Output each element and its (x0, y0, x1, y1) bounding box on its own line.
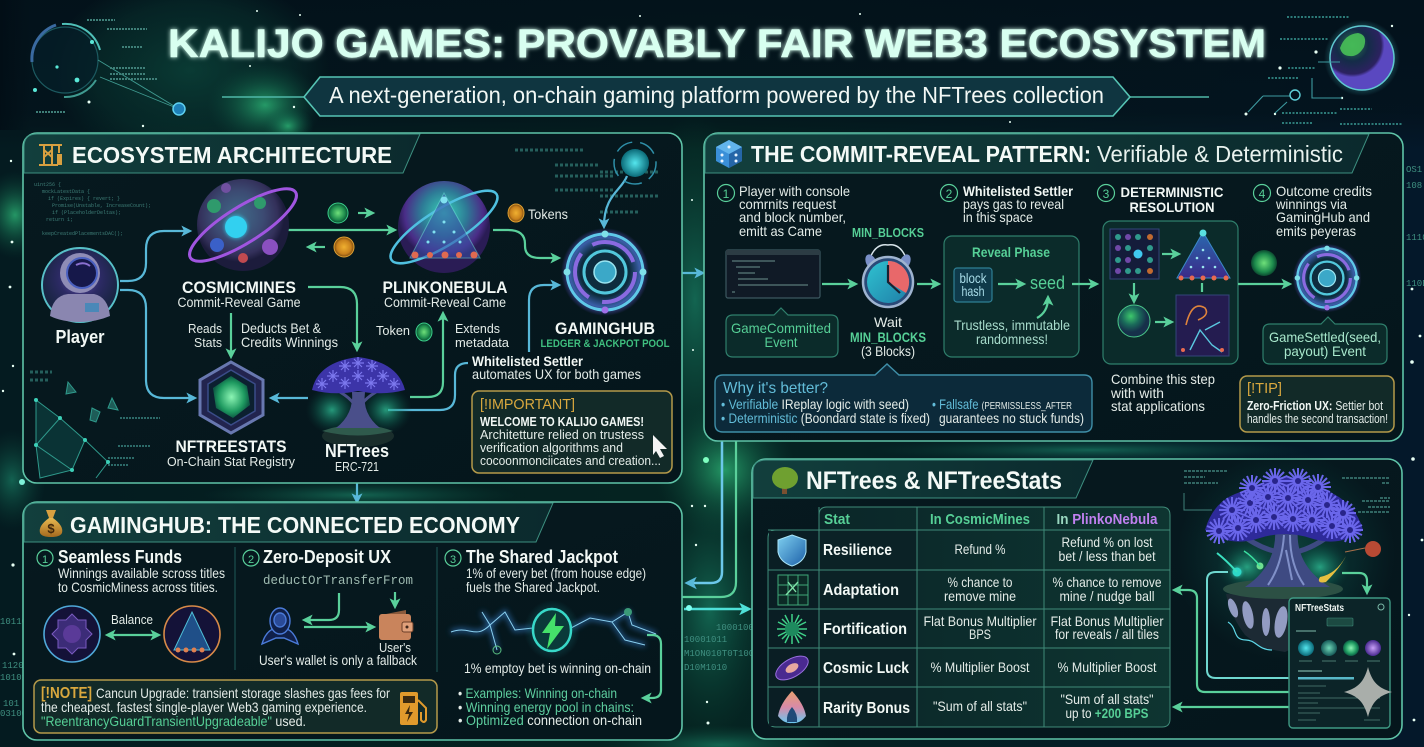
connector arrows between panels (357, 273, 748, 611)
callout: why it's better: • Verifiable IReplay logic with seed) (721, 396, 909, 412)
background: 101 (3, 699, 19, 709)
step 2: in this space (963, 209, 1033, 225)
label: nftreestats (167, 437, 295, 469)
heading: commit-reveal (705, 134, 1369, 173)
heading: ecosystem architecture: ECOSYSTEM ARCHITECTURE (72, 142, 392, 168)
row: cosmic luck: % Multiplier Boost (1058, 659, 1157, 675)
step 1: comrnits request (739, 196, 836, 212)
label: cosmicmines: COSMICMINES (182, 278, 296, 297)
callout: note: "ReentrancyGuardTransientUpgradeable" used. (41, 713, 306, 729)
row: fortification: BPS (969, 626, 991, 642)
label: plinkonebula: Commit-Reveal Came (384, 294, 506, 310)
icon: medal plinko (164, 606, 220, 662)
row: rarity bonus (778, 691, 1154, 723)
row: cosmic luck (772, 651, 1157, 685)
icon: clock (863, 245, 913, 307)
label: cosmicmines: Commit-Reveal Game (178, 294, 301, 310)
illustration: big tree (1175, 450, 1395, 660)
section 3: shared jackpot: fuels the Shared Jackpot. (466, 579, 600, 595)
section 2: zero-deposit: 2 (248, 554, 254, 566)
row: rarity bonus: up to +200 BPS (1066, 705, 1148, 721)
row: resilience: Refund % (954, 541, 1006, 557)
icon: coin orange (334, 237, 354, 257)
step 4: Outcome credits (1276, 183, 1372, 199)
label: extends metadata (455, 321, 510, 350)
event: gamesettled: payout) Event (1284, 343, 1366, 359)
note: combine: Combine this step (1111, 371, 1215, 387)
section 3: shared jackpot: 1% emptoy bet is winning on-chain (464, 660, 651, 676)
label: deducts bet: Credits Winnings (241, 334, 338, 350)
heading: nftrees (753, 460, 1093, 498)
icon: plinko triangle (1177, 230, 1230, 280)
step 4: winnings via (1275, 196, 1347, 212)
icon: console (726, 250, 820, 298)
step 2: 2 (946, 187, 953, 201)
block hash: hash (962, 283, 984, 299)
label: token: Token (376, 323, 410, 338)
label: deducts bet (241, 320, 338, 350)
event: gamecommitted: GameCommitted (731, 320, 831, 336)
decoration: code snippet: uint256 { (34, 182, 61, 188)
callout: note (34, 680, 437, 733)
icon: path map (1176, 295, 1229, 356)
step 1 (718, 183, 850, 239)
decoration: planet top right (1248, 17, 1402, 124)
background: D10M1010 (684, 663, 727, 673)
section 3: shared jackpot: The Shared Jackpot (466, 547, 618, 567)
title: KALIJO GAMES: PROVABLY FAIR WEB3 ECOSYSTEM (168, 22, 1266, 66)
section 1: seamless funds: Balance (111, 612, 153, 627)
decoration: code snippet: return 1; (46, 217, 73, 223)
section 1: seamless funds (37, 547, 225, 662)
icon: astronaut outline (262, 608, 298, 644)
label: nftrees (325, 441, 389, 474)
row: fortification (777, 613, 1164, 644)
row: resilience: Resilience (823, 542, 892, 559)
arrows: tree to table (1175, 572, 1367, 707)
icon: mines grid (1110, 229, 1159, 279)
label: plinkonebula (382, 278, 508, 310)
icon: player astronaut (42, 248, 118, 322)
section 1: seamless funds: to CosmicMiness across tities. (58, 579, 218, 595)
label: whitelisted settler: automates UX for both games (472, 366, 641, 382)
label: reads stats (188, 321, 222, 350)
icon: money bag: $ (47, 521, 55, 536)
icon: wallet (379, 610, 413, 640)
row: adaptation: % chance to remove (1052, 574, 1162, 590)
label: cosmicmines (178, 278, 301, 310)
row: fortification: Fortification (823, 621, 907, 638)
table header: Stat (824, 511, 850, 528)
section 3: shared jackpot (445, 547, 661, 728)
background: 03100 (0, 709, 27, 719)
step 4 (1254, 183, 1372, 239)
section 3: shared jackpot: • Optimized connection on-chain (458, 712, 642, 728)
heading: commit-reveal: THE COMMIT-REVEAL PATTERN: (751, 141, 1091, 167)
decoration: code snippet (34, 182, 151, 237)
callout: why it's better: • Fallsafe (PERMISSLESS_AFTER (932, 396, 1072, 412)
label: whitelisted settler: Whitelisted Settler (472, 353, 583, 369)
section 1: seamless funds: Winnings available scross titles (58, 565, 225, 581)
subtitle banner (222, 77, 1209, 116)
section 1: seamless funds: 1 (42, 554, 48, 566)
event: gamecommitted: Event (764, 334, 798, 350)
label: min blocks: MIN_BLOCKS (852, 225, 924, 240)
icon: small orbiting globe (614, 142, 656, 184)
note: combine: with with (1110, 385, 1164, 401)
row: fortification: for reveals / all tiles (1055, 626, 1159, 642)
subtitle banner: A next-generation, on-chain gaming platform powered by the NFTrees collection (329, 82, 1104, 108)
section 3: shared jackpot: 1% of every bet (from house edge) (466, 565, 646, 581)
note: combine: stat applications (1111, 398, 1205, 414)
icon: coin (1251, 250, 1277, 276)
row: fortification: Flat Bonus Multiplier (1050, 613, 1164, 629)
decoration: code snippet: Promise(Unstable, IncreaseCount); (52, 203, 151, 209)
decoration: network mesh (34, 382, 160, 478)
callout: important: WELCOME TO KALIJO GAMES! (480, 414, 644, 429)
step 1: emitt as Came (739, 223, 822, 239)
section 3: shared jackpot: • Examples: Winning on-chain (458, 685, 617, 701)
heading: connected economy: GAMINGHUB: THE CONNECTED ECONOMY (70, 512, 520, 538)
arrow (822, 283, 855, 285)
label: nftrees: NFTrees (325, 441, 389, 461)
label: nftrees: ERC-721 (335, 459, 379, 474)
heading: nftrees: NFTrees & NFTreeStats (806, 467, 1062, 495)
row: rarity bonus: "Sum of all stats" (1060, 691, 1154, 707)
background: 10110 (0, 617, 27, 627)
tree roots and island (1223, 579, 1343, 652)
section 1: seamless funds: Seamless Funds (58, 547, 182, 567)
decoration: code snippet: keepCreatedPlacementsDAC(); (42, 231, 123, 237)
arrow (917, 283, 938, 285)
step 1: and block number, (739, 209, 846, 225)
label: nftreestats: On-Chain Stat Registry (167, 454, 295, 469)
step 1: Player with console (739, 183, 850, 199)
panel: commit-reveal pattern (704, 133, 1403, 441)
callout: why it's better: guarantees no stuck funds) (939, 410, 1084, 426)
resolution box (1103, 221, 1238, 364)
label: nftreestats: NFTREESTATS (176, 437, 286, 456)
decoration: code snippet: mockLatestData { (42, 189, 90, 195)
background: 10101 (0, 673, 27, 683)
stats table (768, 507, 1170, 727)
callout: note: [!NOTE] (41, 685, 92, 702)
row: resilience (778, 534, 1156, 566)
icon: tree (772, 467, 798, 494)
label: tokens (508, 204, 568, 222)
panel: nftrees and nftreestats (752, 450, 1402, 739)
callout: why it's better (715, 364, 1092, 432)
arrows (120, 176, 627, 410)
row: adaptation: % chance to (948, 574, 1013, 590)
reveal phase box: seed (1030, 273, 1065, 293)
row: rarity bonus: Rarity Bonus (823, 700, 910, 717)
decoration: HUD circle top left (32, 20, 185, 115)
table header: In CosmicMines (930, 511, 1030, 528)
background: 108 (1406, 181, 1422, 191)
label: gaminghub: LEDGER & JACKPOT POOL (540, 338, 670, 350)
reveal phase box (944, 236, 1079, 357)
reveal phase box: Reveal Phase (972, 244, 1050, 260)
label: whitelisted settler (472, 353, 641, 382)
step 3: DETERMINISTIC (1120, 184, 1224, 200)
row: resilience: bet / less than bet (1058, 548, 1156, 564)
step 4: 4 (1259, 187, 1266, 201)
label: reads stats: Reads (188, 321, 222, 336)
step 2: Whitelisted Settler (963, 183, 1073, 199)
event: gamesettled (1263, 317, 1387, 364)
row: cosmic luck: Cosmic Luck (823, 660, 909, 677)
callout: important: verification algorithms and (480, 440, 623, 455)
callout: important (472, 391, 672, 473)
row: rarity bonus: "Sum of all stats" (933, 698, 1027, 714)
step 2: pays gas to reveal (963, 196, 1064, 212)
row: adaptation (778, 574, 1162, 605)
event: gamesettled: GameSettled(seed, (1269, 329, 1381, 345)
step 4: GamingHub and (1276, 209, 1370, 225)
callout: important: cocoonmonciicates and creation... (480, 453, 661, 468)
label: extends metadata: Extends (455, 321, 500, 336)
label: reads stats: Stats (194, 335, 222, 350)
decoration: code snippet: if (Expires) { revert; } (48, 196, 120, 202)
icon: cursor (653, 435, 667, 458)
tree canopy (1205, 468, 1363, 544)
block hash (954, 268, 992, 302)
callout: important: [!IMPORTANT] (480, 396, 575, 413)
label: deducts bet: Deducts Bet & (241, 320, 322, 336)
label: plinkonebula: PLINKONEBULA (382, 278, 508, 297)
callout: note: the cheapest. fastest single-player Web3 gaming experience. (41, 699, 367, 715)
background: M1ON010T0T1001 (684, 649, 760, 659)
callout: why it's better: • Deterministic (Boondard state is fixed) (721, 410, 930, 426)
row: cosmic luck: % Multiplier Boost (930, 659, 1030, 675)
section 2: zero-deposit: deductOrTransferFrom (263, 573, 413, 588)
reveal phase box: Trustless, immutable (954, 317, 1070, 333)
callout: note: Cancun Upgrade: transient storage slashes gas fees for (96, 685, 390, 701)
table header (824, 511, 1158, 528)
step 4: emits peyeras (1276, 223, 1356, 239)
decoration: code snippet: if (PlaceholderDeltas); (52, 210, 121, 216)
decoration: data labels (1184, 471, 1390, 512)
panel: gaminghub connected economy (23, 502, 682, 740)
label: wait: Wait (874, 314, 902, 330)
background: 1120 (2, 661, 24, 671)
section 2: zero-deposit (243, 547, 418, 668)
icon: hub (1293, 244, 1361, 312)
section 3: shared jackpot: • Winning energy pool in chains: (458, 699, 634, 715)
ui card: nftreestats: NFTreeStats (1295, 603, 1344, 614)
heading: commit-reveal: Verifiable & Deterministic (1097, 141, 1343, 167)
icon: nftrees tree (306, 357, 412, 447)
icon: coin green (328, 203, 348, 223)
section 2: zero-deposit: User's (379, 640, 411, 655)
heading: connected economy (24, 503, 553, 542)
icon: money bag (40, 510, 62, 537)
background: 1000100 (716, 623, 754, 633)
icon: nftreestats hexagon (200, 362, 263, 433)
row: adaptation: Adaptation (823, 582, 899, 599)
step 3: 3 (1103, 187, 1110, 201)
icon: crane (39, 145, 62, 165)
event: gamecommitted (726, 308, 838, 357)
label: tokens: Tokens (528, 206, 568, 222)
step 2 (940, 183, 1073, 225)
row: adaptation: mine / nudge ball (1060, 588, 1154, 604)
decoration: binary top right (30, 150, 660, 380)
callout: tip: Zero-Friction UX: Settier bot (1247, 398, 1383, 413)
section 2: zero-deposit: Zero-Deposit UX (263, 547, 391, 567)
icon: plinkonebula planet (382, 179, 506, 275)
background: 10001011 (684, 635, 727, 645)
decoration: sparkle star (1344, 667, 1392, 717)
section 3: shared jackpot: 3 (450, 554, 456, 566)
panel: ecosystem architecture (23, 133, 682, 483)
ui card: nftreestats (1289, 598, 1390, 728)
step 1: 1 (723, 187, 730, 201)
icon: lightning orb (451, 600, 656, 660)
arrow (1238, 283, 1289, 285)
heading: ecosystem architecture (24, 134, 420, 173)
row: adaptation: remove mine (944, 588, 1016, 604)
label: wait: (3 Blocks) (861, 343, 915, 359)
row: resilience: Refund % on lost (1062, 534, 1153, 550)
step 3: RESOLUTION (1130, 199, 1214, 215)
label: player: Player (56, 327, 104, 347)
section 2: zero-deposit: User's wallet is only a fallback (259, 652, 418, 668)
arrow (1072, 283, 1096, 285)
icon: medal cosmic (44, 606, 100, 662)
icon: fuel pump (400, 692, 426, 725)
reveal phase box: randomness! (976, 331, 1048, 347)
label: wait: MIN_BLOCKS (850, 329, 926, 345)
block hash: block (960, 270, 987, 286)
background: OS1 (1406, 165, 1422, 175)
label: gaminghub: GAMINGHUB (555, 319, 655, 338)
callout: tip (1240, 376, 1394, 432)
icon: dice (716, 140, 742, 168)
row: fortification: Flat Bonus Multiplier (924, 613, 1037, 629)
label: extends metadata: metadata (455, 335, 510, 350)
callout: tip: [!TIP] (1247, 380, 1282, 397)
table header: In PlinkoNebula (1056, 511, 1158, 528)
icon: cosmicmines planet (181, 177, 305, 273)
callout: why it's better: Why it's better? (723, 380, 828, 397)
icon: gaminghub (561, 228, 649, 316)
callout: important: Architetture relied on trustess (480, 427, 644, 442)
icon: green planet (1118, 305, 1150, 337)
step 3 (1098, 184, 1224, 215)
particles (1217, 541, 1381, 582)
label: wait (850, 314, 926, 359)
label: token (376, 323, 432, 341)
note: combine (1110, 371, 1215, 414)
label: gaminghub (540, 319, 670, 350)
